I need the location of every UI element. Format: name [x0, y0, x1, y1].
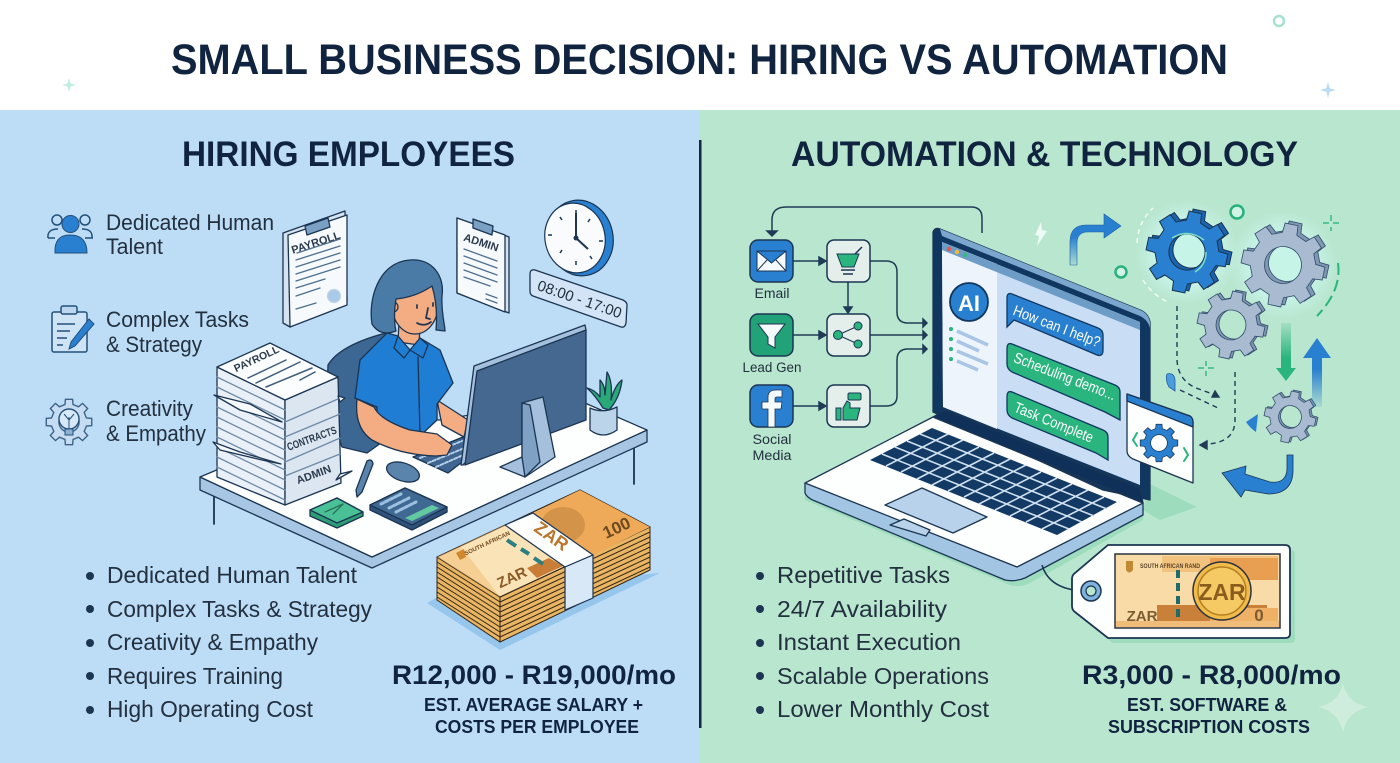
central divider: [699, 140, 702, 728]
office chair: [328, 333, 386, 453]
money stack: [427, 490, 660, 650]
dashed flow lines: [1137, 208, 1339, 449]
feature text: creativity and empathy: & Empathy: [106, 421, 206, 446]
bullet list: automation: Scalable Operations: [777, 663, 989, 689]
flow icon: share nodes: [827, 314, 870, 356]
hours label: 08:00 - 17:00: [535, 277, 624, 322]
face: [392, 276, 438, 334]
bullet list: automation: 24/7 Availability: [777, 596, 948, 622]
title: SMALL BUSINESS DECISION: HIRING VS AUTOMATION: [171, 36, 1228, 84]
hair: [371, 260, 445, 333]
banknote: 0: [1254, 606, 1264, 625]
trackpad: [885, 488, 987, 533]
pen: [356, 460, 373, 497]
gear: medium gray: [1191, 284, 1274, 365]
document stack: PAYROLL: [232, 343, 282, 375]
document stack: [213, 343, 352, 505]
label: social media: [752, 432, 792, 463]
tag shadow: [1077, 550, 1295, 643]
price caption: hiring: COSTS PER EMPLOYEE: [435, 716, 639, 737]
shirt: [355, 333, 453, 436]
computer monitor: [461, 325, 586, 477]
computer mouse: [384, 458, 422, 486]
flow icon: facebook: [750, 385, 793, 427]
price caption: automation: SUBSCRIPTION COSTS: [1108, 716, 1310, 737]
arrow: blue curved right: [1070, 214, 1121, 265]
laptop: [805, 228, 1197, 586]
neck: [398, 322, 420, 345]
laptop base: [805, 417, 1143, 581]
feature text: complex tasks and strategy: & Strategy: [106, 332, 202, 357]
far arm: [437, 400, 468, 437]
panel heading: hiring employees: HIRING EMPLOYEES: [182, 135, 515, 174]
bullet list: hiring employees: Dedicated Human Talent: [107, 562, 358, 588]
flow connectors: [767, 207, 982, 410]
price caption: hiring: EST. AVERAGE SALARY +: [424, 694, 643, 715]
decorative sparkle: green: [62, 78, 76, 92]
desk: [200, 400, 647, 568]
bullet list: automation: Instant Execution: [777, 629, 961, 655]
flow icon: lead generation funnel: [750, 314, 793, 356]
panel: automation and technology: [700, 110, 1400, 763]
clipboard: admin: [457, 218, 509, 313]
feature text: dedicated human talent: Talent: [106, 234, 163, 259]
flow icon: email: [750, 240, 793, 282]
money shadow: [427, 573, 660, 650]
bullet list: hiring employees: [86, 562, 372, 722]
icon: clipboard and pen: [52, 306, 94, 352]
clipboard: payroll: [283, 211, 347, 327]
gear: blue: [1139, 202, 1239, 300]
arrow: blue curved left: [1222, 455, 1293, 497]
chat bubble: task complete: Task Complete: [1012, 399, 1096, 446]
panel: hiring employees: [0, 110, 700, 763]
AI badge: AI: [958, 291, 980, 316]
decorative ring: [1274, 16, 1284, 26]
bullet list: automation: Repetitive Tasks: [777, 562, 950, 588]
money stack: 100: [600, 513, 634, 543]
icon: wall clock: [538, 194, 620, 282]
header band: [0, 0, 1400, 110]
tag body: [1072, 545, 1290, 638]
money stack: ZAR: [495, 564, 530, 592]
near arm and hand: [357, 399, 452, 456]
bullet list: hiring employees: High Operating Cost: [107, 696, 314, 722]
keyboard: [413, 437, 475, 473]
price: hiring: R12,000 - R19,000/mo: [392, 660, 676, 690]
icon: lightbulb in gear: [46, 399, 92, 445]
floating settings window: [1127, 394, 1193, 483]
feature text: creativity and empathy: [106, 396, 206, 446]
decorative sparkle: [1318, 683, 1368, 732]
clipboard: payroll: PAYROLL: [290, 230, 342, 257]
arrow: green down: [1276, 323, 1296, 381]
feature text: creativity and empathy: Creativity: [106, 396, 193, 421]
bullet list: automation: [756, 562, 990, 722]
bullet list: hiring employees: Creativity & Empathy: [107, 629, 318, 655]
document stack: CONTRACTS: [285, 425, 338, 454]
green notepad: [310, 498, 363, 528]
feature text: complex tasks and strategy: Complex Tasks: [106, 307, 249, 332]
laptop shadow: [805, 484, 1197, 586]
banknote: ZAR: [1198, 579, 1246, 605]
label: social media: Social: [752, 432, 792, 447]
gear: small gray: [1260, 386, 1322, 447]
feature text: complex tasks and strategy: [106, 307, 249, 357]
notes: [437, 490, 650, 642]
clipboard: admin: ADMIN: [462, 232, 500, 254]
chat bubble: scheduling demo: Scheduling demo...: [1011, 350, 1118, 404]
paper band: [505, 513, 593, 610]
price caption: automation: [1108, 694, 1310, 737]
gear: large gray: [1234, 214, 1336, 314]
icon: people: [48, 215, 93, 253]
paper band: ZAR: [531, 517, 572, 555]
banknote: ZAR: [1127, 608, 1158, 625]
flow icon: shopping cart: [827, 240, 870, 282]
chat bubble: how can I help: How can I help?: [1011, 302, 1103, 351]
banknote: SOUTH AFRICAN RAND: [1140, 563, 1200, 570]
feature text: dedicated human talent: [106, 210, 274, 259]
price tag: [1042, 545, 1295, 643]
price caption: automation: EST. SOFTWARE &: [1127, 694, 1287, 715]
label: social media: Media: [752, 448, 792, 463]
label: lead gen: Lead Gen: [742, 360, 802, 375]
calculator: [370, 488, 447, 530]
potted plant: [587, 372, 622, 435]
AI badge: [950, 283, 988, 321]
gears cluster: [1135, 200, 1337, 447]
tag eyelet: [1081, 581, 1101, 601]
tag string: [1042, 565, 1091, 591]
chat bubble: scheduling demo: [1007, 344, 1120, 420]
bullet list: automation: Lower Monthly Cost: [777, 696, 990, 722]
money stack: SOUTH AFRICAN: [464, 531, 511, 557]
document stack: ADMIN: [295, 463, 333, 487]
person at desk: [355, 260, 468, 456]
decorative rings and sparkles: [1035, 206, 1339, 432]
banknote: [1115, 554, 1280, 628]
flow icon: like and comment: [827, 385, 870, 427]
sidebar list: [951, 329, 988, 370]
bullet list: hiring employees: Complex Tasks & Strategy: [107, 596, 372, 622]
feature text: dedicated human talent: Dedicated Human: [106, 210, 274, 235]
arrow: blue up: [1303, 338, 1331, 407]
price: automation: R3,000 - R8,000/mo: [1082, 660, 1341, 690]
eyes nose mouth: [417, 303, 433, 325]
decorative sparkle: blue: [1320, 82, 1336, 98]
panel heading: automation and technology: AUTOMATION & TECHNOLOGY: [791, 135, 1298, 174]
bullet list: hiring employees: Requires Training: [107, 663, 283, 689]
laptop screen: [933, 228, 1150, 503]
keyboard: [870, 428, 1117, 535]
price caption: hiring: [424, 694, 643, 737]
label: email: Email: [754, 286, 790, 301]
